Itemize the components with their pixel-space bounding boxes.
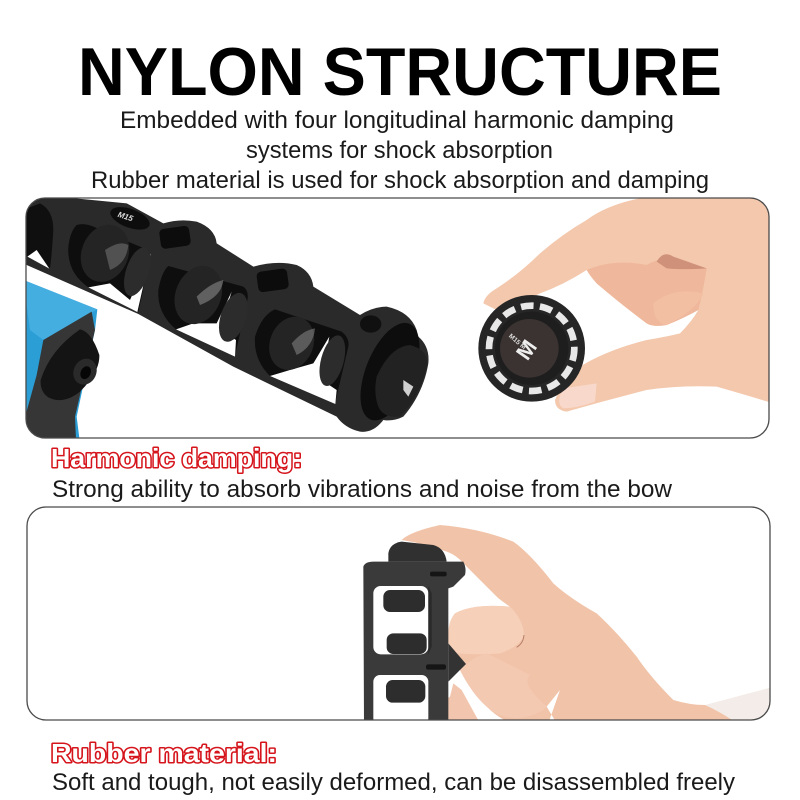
panel: rubber material photo <box>27 507 772 725</box>
text: harmonic damping description: Strong ability to absorb vibrations and noise from the bow <box>52 476 673 503</box>
icon: blue bow mount with bolt <box>23 280 101 443</box>
logo badge <box>110 207 150 230</box>
heading: harmonic damping: Harmonic damping: <box>51 443 302 473</box>
icon: stabilizer damper body: M15 <box>117 210 135 224</box>
end ring <box>360 323 420 420</box>
intro text block: Embedded with four longitudinal harmonic damping <box>120 107 674 134</box>
icon: black damping disc with logo: M <box>511 335 542 365</box>
icon: hand holding disc <box>483 197 770 412</box>
end cap <box>375 345 427 417</box>
icon: stabilizer damper body <box>23 193 432 432</box>
icon: upright damper with rubber discs <box>363 542 466 725</box>
icon: hand pressing damper <box>402 525 772 723</box>
window 2 <box>158 266 248 356</box>
intro text block: Rubber material is used for shock absorption and damping <box>91 167 709 194</box>
window 1 <box>68 224 149 312</box>
title: NYLON STRUCTURE <box>78 34 722 110</box>
bolt holes <box>159 225 191 249</box>
intro text block: systems for shock absorption <box>246 137 553 164</box>
icon: black damping disc with logo: M15 M <box>507 333 527 352</box>
panel: harmonic damping photos <box>23 193 770 443</box>
window 0 <box>23 203 53 268</box>
intro text block <box>91 107 709 194</box>
heading: rubber material: Rubber material: <box>51 738 277 768</box>
window 3 <box>255 309 349 403</box>
icon: black damping disc with logo <box>478 295 585 402</box>
text: rubber material description: Soft and tough, not easily deformed, can be disassembled freely <box>52 769 735 796</box>
